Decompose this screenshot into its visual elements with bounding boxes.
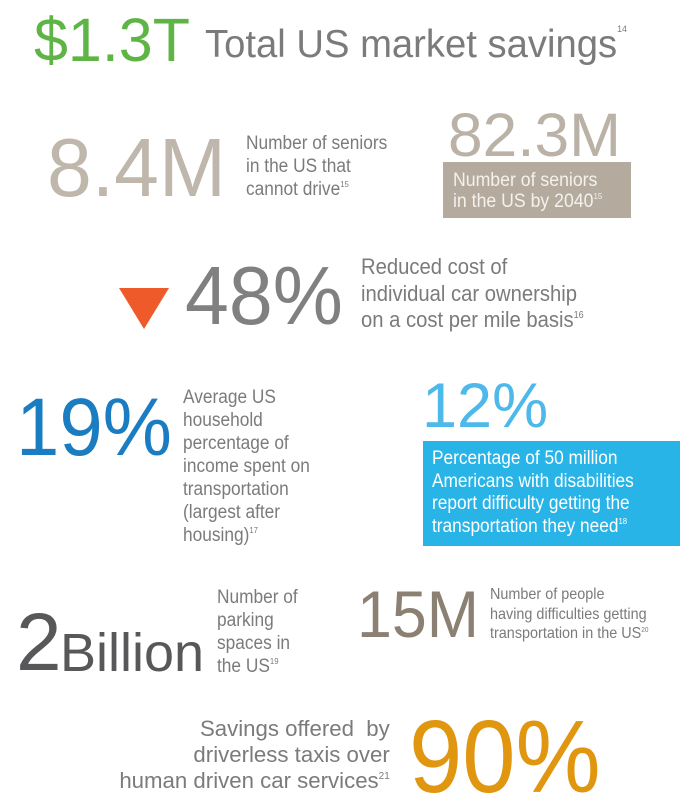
text: parking spaces: parking: [217, 610, 274, 631]
text: seniors cannot drive: cannot drive15: [246, 179, 349, 200]
text: driverless taxi savings: human driven car services21: [120, 768, 390, 793]
headline text: total US market savings: Total US market savings14: [205, 23, 627, 66]
text: parking spaces: spaces in: [217, 633, 290, 654]
box: seniors by 2040: Number of seniors: [453, 170, 597, 191]
stat: 2 Billion: Billion: [60, 623, 204, 683]
text: reduced cost: individual car ownership: [361, 280, 577, 306]
box: disabilities: Americans with disabilities: [432, 471, 634, 492]
box: seniors by 2040: [443, 162, 631, 218]
stat: 8.4M: 8.4M: [47, 121, 226, 214]
icon: down triangle: [119, 288, 169, 329]
headline: $1.3T: $1.3T: [34, 6, 190, 74]
box: seniors by 2040: in the US by 204015: [453, 191, 602, 212]
text: household income: [183, 387, 310, 546]
text: reduced cost: on a cost per mile basis16: [361, 307, 584, 332]
stat: 12%: 12%: [422, 371, 548, 441]
text: people with difficulties: [490, 586, 648, 642]
text: parking spaces: the US19: [217, 656, 279, 677]
box: disabilities: Percentage of 50 million: [432, 448, 617, 469]
box: disabilities: transportation they need18: [432, 516, 627, 537]
stat: 48%: 48%: [185, 249, 343, 342]
box: disabilities: [423, 441, 680, 546]
text: reduced cost: [361, 254, 584, 332]
text: driverless taxi savings: driverless taxis over: [194, 742, 390, 767]
stat: 19%: 19%: [16, 382, 172, 473]
text: parking spaces: [217, 587, 298, 677]
text: household income: household: [183, 410, 263, 431]
stat: 2 Billion: [16, 597, 204, 688]
stat: 15M: 15M: [357, 577, 479, 651]
text: parking spaces: Number of: [217, 587, 298, 608]
text: people with difficulties: transportation in the US20: [490, 625, 648, 642]
stat: 82.3M: 82.3M: [448, 101, 621, 169]
text: driverless taxi savings: [120, 716, 390, 793]
text: household income: Average US: [183, 387, 276, 408]
box: disabilities: report difficulty getting the: [432, 493, 630, 514]
text: household income: housing)17: [183, 525, 258, 546]
stat: 2 Billion: 2: [16, 597, 62, 688]
text: household income: (largest after: [183, 502, 280, 523]
text: seniors cannot drive: Number of seniors: [246, 133, 387, 154]
text: people with difficulties: having difficulties getting: [490, 606, 647, 622]
text: household income: transportation: [183, 479, 289, 500]
text: household income: income spent on: [183, 456, 310, 477]
text: seniors cannot drive: in the US that: [246, 156, 351, 177]
text: driverless taxi savings: Savings offered by: [200, 716, 390, 741]
text: seniors cannot drive: [246, 133, 387, 200]
text: reduced cost: Reduced cost of: [361, 254, 507, 279]
text: people with difficulties: Number of people: [490, 586, 604, 603]
stat: 90%: 90%: [409, 699, 601, 811]
text: household income: percentage of: [183, 433, 289, 454]
